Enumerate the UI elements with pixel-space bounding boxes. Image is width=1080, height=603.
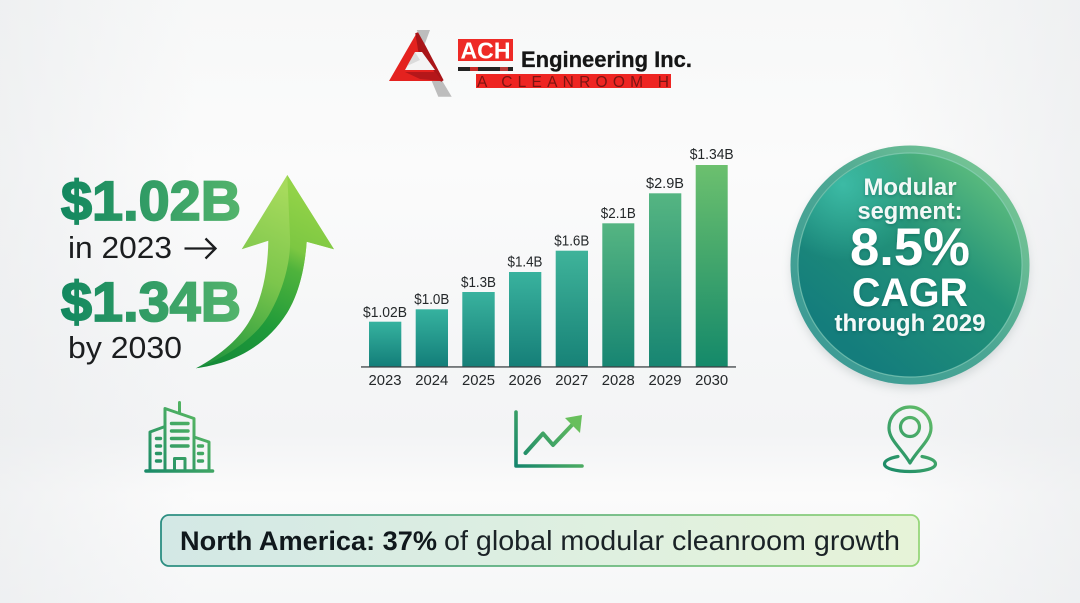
callout bold text: North America: 37% [180, 526, 437, 556]
callout regular text: of global modular cleanroom growth [444, 525, 900, 556]
logo mark: triangle [389, 30, 452, 97]
badge text: segment: [858, 198, 962, 225]
icon: location pin [884, 407, 936, 472]
bar value labels: $1.02B [363, 305, 407, 321]
label: by 2030: by 2030 [68, 330, 182, 365]
bar value labels: $1.4B [508, 254, 542, 270]
year axis labels: 2028 [602, 373, 635, 389]
bar value labels [363, 147, 734, 321]
label: in 2023: in 2023 [68, 230, 172, 265]
year axis labels: 2029 [648, 373, 682, 389]
bar value labels: $1.3B [461, 275, 496, 291]
chart axis [361, 366, 736, 368]
callout: North America share [161, 515, 919, 566]
year axis labels: 2023 [368, 373, 402, 389]
badge text: 8.5% [850, 218, 970, 277]
icon: office buildings [146, 402, 212, 471]
bar value labels: $2.1B [601, 206, 636, 222]
year axis labels: 2027 [555, 373, 588, 389]
logo: ACH Engineering Inc. [389, 30, 692, 97]
bar value labels: $2.9B [646, 176, 684, 192]
badge text: through 2029 [834, 310, 986, 337]
growth arrow [196, 175, 334, 368]
year axis labels: 2026 [508, 373, 542, 389]
logo badge: ACH: ACH [460, 38, 510, 64]
bar value labels: $1.6B [554, 234, 589, 250]
CAGR badge [790, 146, 1030, 388]
year axis labels [368, 373, 728, 389]
bar chart: market size 2023-2030 [361, 147, 736, 389]
badge text [834, 174, 986, 337]
year axis labels: 2025 [462, 373, 495, 389]
logo tagline strip: A CLEANROOM H [477, 74, 669, 91]
headline figures [61, 169, 241, 365]
arrow: to [184, 238, 216, 258]
badge text: Modular [864, 174, 956, 201]
bar value labels: $1.0B [414, 292, 449, 308]
year axis labels: 2030 [695, 373, 728, 389]
icon: growth chart [516, 412, 582, 466]
bars [369, 165, 728, 367]
figure: $1.02B: $1.02B [61, 169, 241, 232]
figure: $1.34B: $1.34B [61, 270, 241, 333]
badge text: CAGR [852, 271, 968, 315]
bar value labels: $1.34B [690, 147, 734, 163]
logo wordmark: Engineering Inc. [521, 47, 692, 72]
year axis labels: 2024 [415, 373, 448, 389]
